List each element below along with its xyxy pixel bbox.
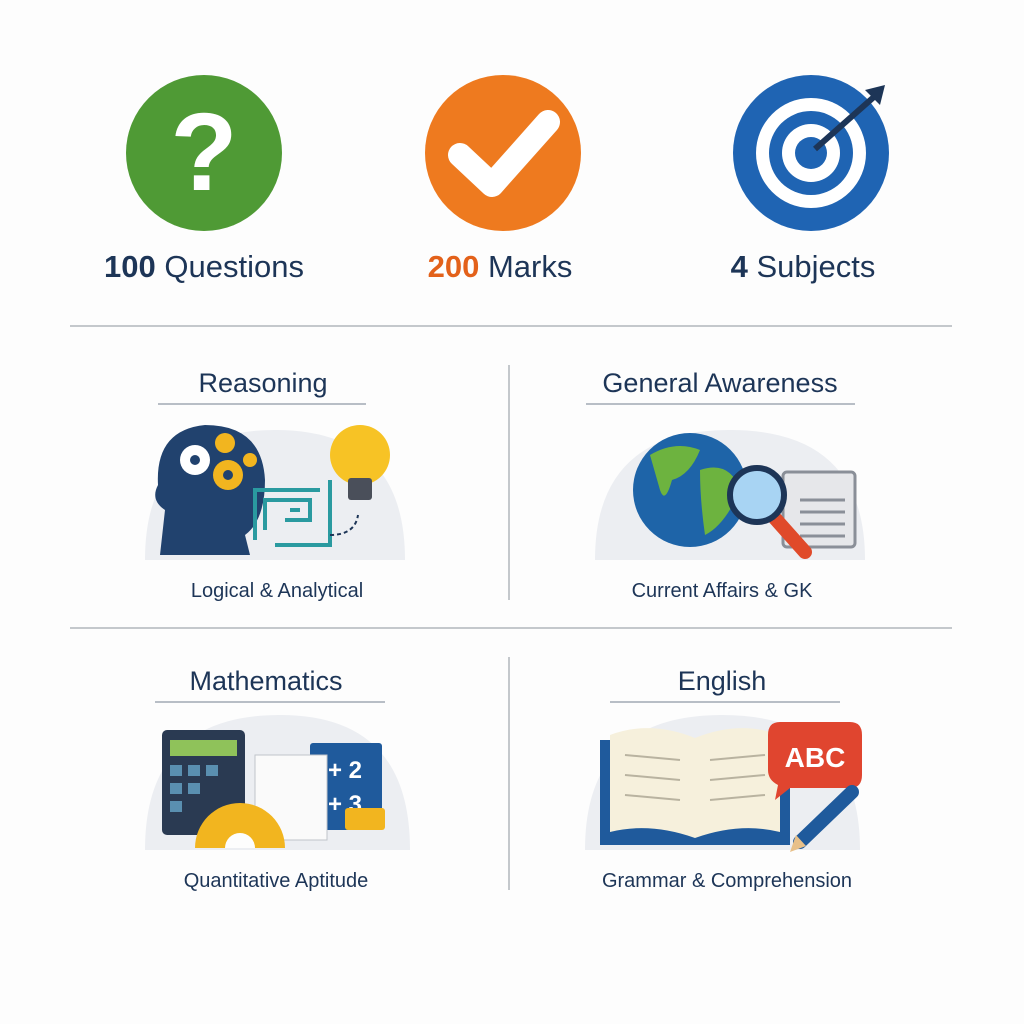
illustration: calculator, notepad, board, protractor [145, 715, 410, 850]
label: 200 Marks: 200 Marks [428, 249, 572, 284]
panel: Mathematics [145, 666, 410, 892]
label: 4 Subjects: 4 Subjects [731, 249, 875, 284]
icon: target [733, 75, 889, 231]
caption: Quantitative Aptitude [184, 870, 368, 892]
stat: 200 Marks [425, 75, 581, 284]
label: 100 Questions: 100 Questions [104, 249, 304, 284]
caption: Grammar & Comprehension [602, 870, 852, 892]
heading: General Awareness [602, 368, 838, 398]
panel: English [585, 666, 862, 892]
stat: 100 Questions [104, 75, 304, 284]
illustration: calculator, notepad, board, protractor: + 3 [328, 791, 362, 818]
heading: Reasoning: Reasoning [198, 368, 328, 398]
illustration: head, gears, maze, bulb [145, 425, 405, 560]
illustration: book, speech bubble, pencil: ABC [785, 742, 845, 773]
panel: Reasoning [145, 368, 405, 602]
panel: General Awareness [586, 368, 865, 602]
illustration: globe, magnifier, newspaper [595, 430, 865, 560]
illustration: book, speech bubble, pencil [585, 715, 862, 852]
heading: Mathematics [189, 666, 343, 696]
icon: question mark [126, 75, 282, 231]
icon: check mark [425, 75, 581, 231]
icon: question mark: ? [170, 91, 238, 214]
caption: Current Affairs & GK [632, 580, 813, 602]
caption: Logical & Analytical [191, 580, 363, 602]
illustration: calculator, notepad, board, protractor: + 2 [328, 757, 362, 784]
heading: English [678, 666, 766, 696]
stat: 4 Subjects [731, 75, 889, 284]
